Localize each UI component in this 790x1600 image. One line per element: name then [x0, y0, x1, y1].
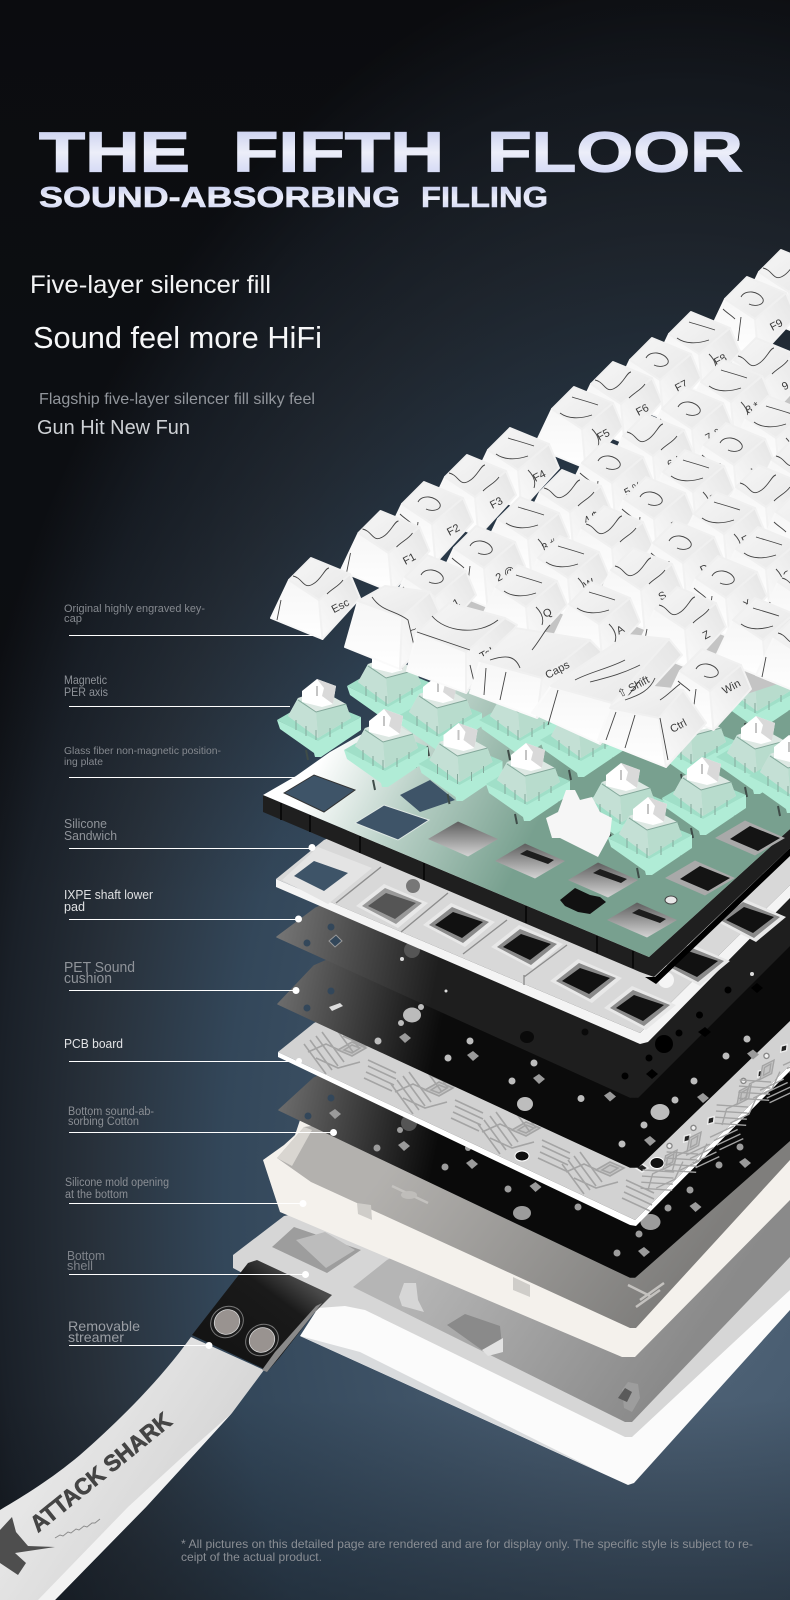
layer: engraved keycaps: Z	[701, 628, 713, 642]
tray floor	[277, 1000, 790, 1328]
brand text: ATTACK SHARK	[25, 1407, 177, 1537]
layer: engraved keycaps: 6 ^	[665, 453, 684, 471]
label: IXPE shaft lower pad: IXPE shaft lower	[64, 888, 153, 902]
layer: engraved keycaps: 7 &	[703, 426, 724, 445]
layer: PCB board	[278, 800, 790, 1226]
label: silicone sandwich	[64, 816, 316, 851]
label: silicone mold opening: at the bottom	[65, 1189, 128, 1201]
keycap: Tab: Tab	[478, 644, 499, 663]
shell corner post	[622, 1382, 640, 1412]
shell white front	[300, 1290, 790, 1485]
title: FIFTH	[233, 120, 444, 184]
label: bottom sound-absorbing cotton: Bottom sound-ab-	[68, 1106, 154, 1118]
label: removable streamer	[68, 1318, 212, 1349]
keycap: Caps: Caps	[543, 659, 572, 682]
footnote	[181, 1537, 753, 1564]
clasp	[192, 1260, 332, 1372]
layer: engraved keycaps: F1	[401, 551, 418, 568]
layer: engraved keycaps: R	[669, 518, 682, 533]
strap	[0, 1260, 332, 1600]
strap body	[0, 1337, 264, 1600]
keycap: Tab	[407, 603, 517, 693]
layer: silicone sandwich	[276, 640, 790, 1044]
label: glass fiber plate	[64, 745, 295, 778]
label: silicone sandwich: Silicone	[64, 816, 107, 831]
subtitle: SOUND-ABSORBING	[39, 182, 400, 214]
label: glass fiber plate: ing plate	[64, 756, 103, 768]
title	[39, 120, 743, 184]
layer: engraved keycaps: S	[657, 589, 669, 603]
layer: engraved keycaps: F4	[531, 468, 548, 485]
layer: engraved keycaps: F3	[488, 495, 505, 512]
layer: engraved keycaps: 2 @	[494, 564, 517, 584]
layer: engraved keycaps: F5	[595, 427, 612, 444]
sandwich cells	[356, 879, 786, 1030]
text: five-layer silencer fill: Five-layer silencer fill	[30, 271, 271, 299]
pcb white edge	[278, 1052, 790, 1226]
keycap: tilde: ~	[408, 624, 419, 637]
subtitle: FILLING	[421, 182, 548, 214]
label: IXPE shaft lower pad: pad	[64, 900, 85, 914]
layer: engraved keycaps: T	[709, 491, 721, 505]
layer: IXPE shaft lower pad	[277, 700, 790, 1097]
label: engraved keycap: cap	[64, 613, 82, 625]
keycap: Shift	[532, 635, 682, 744]
label: bottom shell: Bottom	[67, 1249, 105, 1263]
keyboard gap fill	[450, 360, 790, 735]
keycap: Esc: Esc	[330, 597, 352, 616]
brand logo	[0, 1517, 55, 1575]
label: PET sound cushion: PET Sound	[64, 960, 135, 976]
label: silicone mold opening: Silicone mold opening	[65, 1177, 169, 1189]
label: PET sound cushion	[64, 960, 300, 994]
label: removable streamer: Removable	[68, 1318, 140, 1334]
sandwich white edge	[276, 879, 790, 1044]
keycap: Ctrl	[598, 678, 706, 767]
layer: magnetic switches	[277, 645, 790, 878]
shell rim	[233, 1120, 790, 1445]
label: IXPE shaft lower pad	[64, 888, 302, 922]
pcb large holes	[515, 1151, 529, 1161]
layer: engraved keycaps: D	[698, 562, 711, 577]
sandwich cell: blue opening	[282, 847, 372, 904]
layer: engraved keycaps: F8	[712, 352, 729, 369]
keycap: Caps	[470, 625, 602, 718]
label: PCB board	[64, 1037, 302, 1064]
layer: engraved keycaps: 4 $	[582, 509, 601, 527]
label: engraved keycap	[64, 603, 315, 636]
pcb traces	[304, 1032, 396, 1091]
layer: engraved keycaps: F9	[768, 317, 785, 334]
rivet one	[204, 1300, 250, 1344]
footnote: ceipt of the actual product.	[181, 1550, 322, 1564]
label: bottom sound-absorbing cotton	[68, 1106, 337, 1136]
label: removable streamer: streamer	[68, 1329, 124, 1345]
title: FLOOR	[487, 120, 743, 184]
layer: engraved keycaps: 1	[451, 597, 462, 610]
keycap: tilde	[345, 586, 445, 669]
layer: engraved keycaps	[271, 250, 790, 767]
white switch	[546, 790, 612, 857]
label: engraved keycap: Original highly engraved key-	[64, 603, 205, 615]
layer: engraved keycaps: 3 #	[540, 536, 560, 554]
layer: bottom sound-absorbing cotton	[279, 900, 790, 1277]
label: bottom sound-absorbing cotton: sorbing Cotton	[68, 1116, 139, 1128]
layer: engraved keycaps: 5 %	[622, 480, 645, 499]
label: magnetic PER axis: PER axis	[64, 685, 108, 699]
keycap: Shift: ⇧ Shift	[616, 674, 652, 701]
label: bottom shell	[67, 1249, 309, 1278]
label: bottom shell: shell	[67, 1259, 93, 1273]
tray notches	[357, 1203, 372, 1220]
brand wave	[55, 1519, 100, 1538]
keycap: Ctrl: Ctrl	[668, 717, 689, 736]
shell recess	[272, 1227, 361, 1273]
layer: engraved keycaps: Q	[541, 606, 555, 621]
pcb surface	[278, 800, 790, 1220]
layer: bottom shell	[233, 1100, 790, 1485]
layer: engraved keycaps: X	[742, 597, 754, 611]
tray floor markings	[392, 1186, 664, 1307]
layer: engraved keycaps: F6	[634, 402, 651, 419]
layer: engraved keycaps: F	[740, 533, 752, 547]
text: sound feel more hifi: Sound feel more HiFi	[33, 320, 322, 355]
layer: engraved keycaps: 8 *	[744, 400, 762, 417]
subtitle	[39, 182, 548, 214]
label: PET sound cushion: cushion	[64, 971, 112, 987]
plate side	[263, 795, 790, 977]
text: gun hit new fun: Gun Hit New Fun	[37, 417, 190, 439]
title: THE	[39, 120, 190, 184]
shell floor	[353, 1100, 790, 1422]
layer: silicone mold tray	[263, 1000, 790, 1357]
shell peg and usb block	[399, 1283, 424, 1312]
layer: engraved keycaps: F7	[673, 378, 690, 395]
layer: engraved keycaps: Y	[750, 464, 762, 478]
layer: engraved keycaps: A	[615, 623, 627, 637]
layer: engraved keycaps: E	[628, 547, 640, 561]
label: glass fiber plate: Glass fiber non-magnetic position-	[64, 745, 221, 757]
layer: engraved keycaps: Win	[720, 678, 743, 697]
text: flagship description: Flagship five-layer silencer fill silky feel	[39, 391, 315, 408]
plate surface	[263, 690, 790, 957]
rivet two	[239, 1318, 285, 1362]
sandwich surface	[276, 640, 790, 1033]
layer: engraved keycaps: F2	[445, 522, 462, 539]
label: PCB board: PCB board	[64, 1037, 123, 1051]
keycap: Esc	[271, 558, 360, 639]
label: magnetic PER axis: Magnetic	[64, 673, 107, 687]
strap fold sliver	[38, 1413, 232, 1600]
label: silicone mold opening	[65, 1177, 306, 1207]
tray body	[263, 1000, 790, 1357]
layer: glass fiber plate	[263, 690, 790, 984]
plate openings	[284, 775, 785, 938]
label: magnetic PER axis	[64, 673, 290, 707]
layer: PET sound cushion	[278, 760, 790, 1167]
label: silicone sandwich: Sandwich	[64, 828, 117, 843]
layer: engraved keycaps: W	[582, 576, 598, 592]
footnote: * All pictures on this detailed page are rendered and are for display only. The specific style is subject to re-	[181, 1537, 753, 1551]
